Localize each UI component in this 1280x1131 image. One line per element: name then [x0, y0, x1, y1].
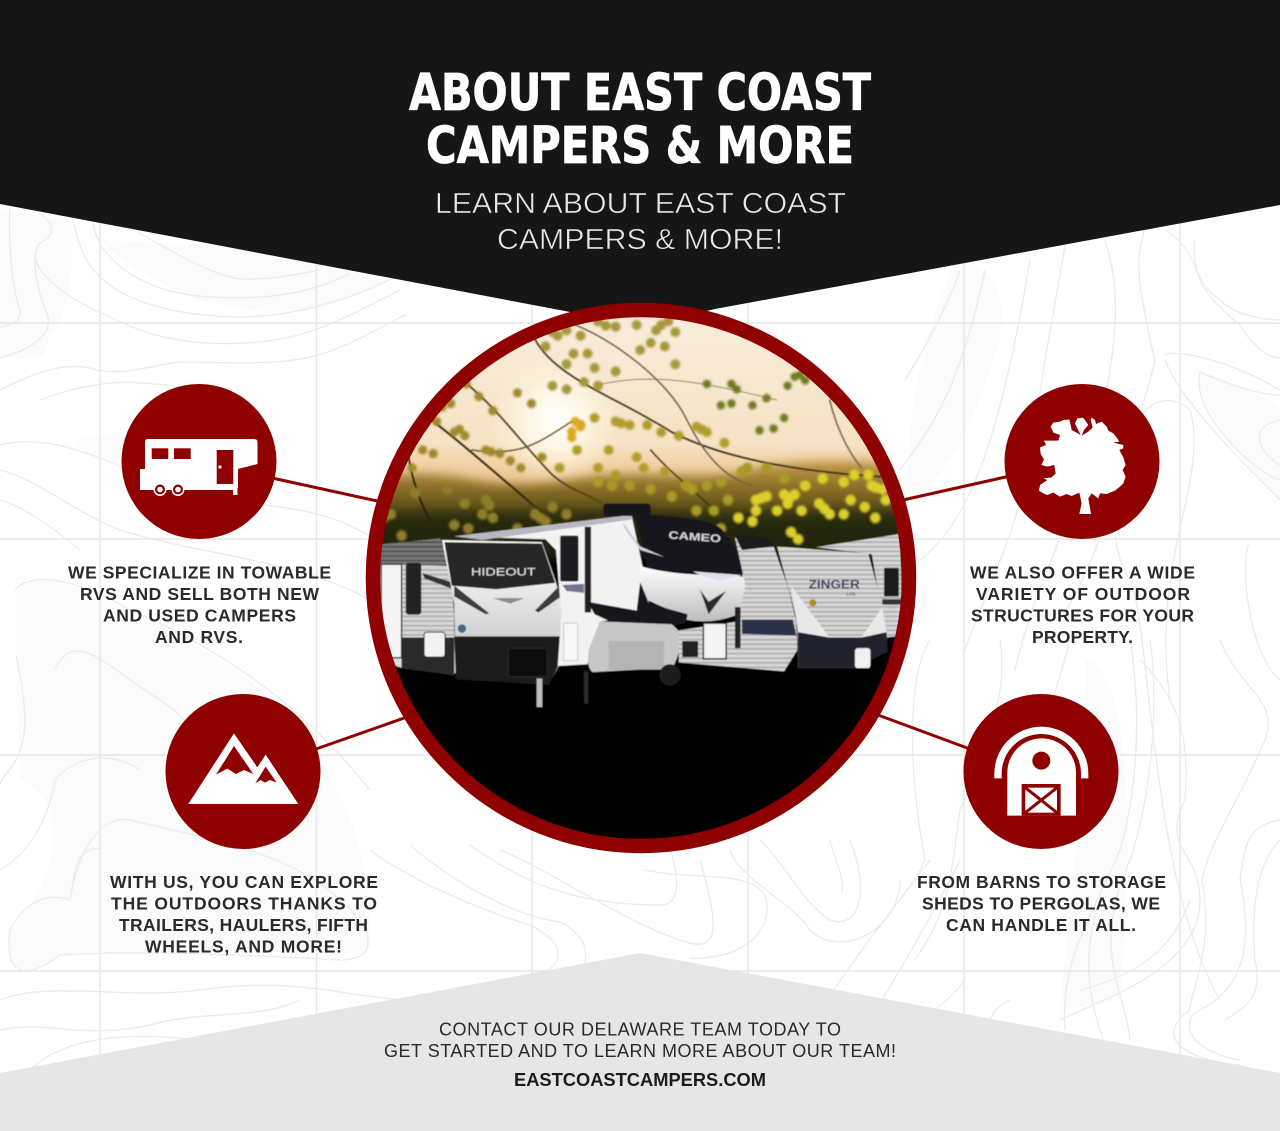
text: barns and sheds: SHEDS TO PERGOLAS, WE [922, 894, 1160, 914]
text: towable RVs: AND RVS. [155, 627, 243, 647]
text: explore the outdoors [110, 872, 378, 956]
text: towable RVs: WE SPECIALIZE IN TOWABLE [68, 562, 331, 582]
title: ABOUT EAST COAST [409, 64, 871, 123]
subtitle [435, 188, 846, 256]
footer call to action: GET STARTED AND TO LEARN MORE ABOUT OUR TEAM! [384, 1041, 896, 1061]
footer call to action: CONTACT OUR DELAWARE TEAM TODAY TO [439, 1020, 841, 1040]
photo Zinger trailer [659, 534, 903, 686]
text: explore the outdoors: THE OUTDOORS THANKS TO [111, 894, 377, 914]
footer call to action [384, 1020, 896, 1090]
footer call to action: EASTCOASTCAMPERS.COM [514, 1070, 766, 1090]
text: barns and sheds [917, 872, 1166, 935]
photo Hideout trailer [363, 539, 564, 707]
central photo: RVs at sunset [363, 293, 931, 868]
photo branches [409, 321, 882, 539]
text: towable RVs [68, 562, 331, 647]
icon: tree [1004, 384, 1160, 539]
photo Cameo fifth wheel: CAMEO [668, 529, 721, 545]
photo Hideout trailer: HIDEOUT [471, 567, 536, 579]
text: outdoor structures: STRUCTURES FOR YOUR [971, 606, 1194, 626]
subtitle: LEARN ABOUT EAST COAST [435, 188, 846, 220]
photo sky [398, 317, 878, 492]
connector lines [272, 476, 1010, 749]
photo ring [373, 310, 909, 846]
title: CAMPERS & MORE [426, 117, 854, 176]
icon: mountains [166, 694, 320, 849]
photo Cameo fifth wheel [454, 504, 746, 704]
text: outdoor structures: PROPERTY. [1032, 627, 1133, 647]
text: outdoor structures [970, 562, 1195, 647]
subtitle: CAMPERS & MORE! [497, 224, 783, 256]
text: barns and sheds: CAN HANDLE IT ALL. [946, 915, 1136, 935]
text: outdoor structures: WE ALSO OFFER A WIDE [970, 562, 1195, 582]
title [409, 64, 871, 176]
text: towable RVs: RVS AND SELL BOTH NEW [80, 584, 319, 604]
photo tree line [363, 461, 931, 557]
photo Zinger trailer: ZINGER [809, 577, 860, 592]
text: barns and sheds: FROM BARNS TO STORAGE [917, 872, 1166, 892]
text: outdoor structures: VARIETY OF OUTDOOR [976, 584, 1190, 604]
text: explore the outdoors: WITH US, YOU CAN EXPLORE [110, 872, 378, 892]
contour lines [0, 207, 1280, 1070]
header black band [0, 0, 1280, 326]
text: explore the outdoors: WHEELS, AND MORE! [145, 936, 342, 956]
photo leaves [384, 321, 886, 539]
text: explore the outdoors: TRAILERS, HAULERS, FIFTH [119, 915, 368, 935]
icon: barn [964, 694, 1118, 849]
photo Zinger trailer: LITE [847, 592, 856, 597]
footer grey band [0, 953, 1280, 1131]
icon: fifth-wheel RV [122, 384, 276, 539]
text: towable RVs: AND USED CAMPERS [103, 606, 296, 626]
